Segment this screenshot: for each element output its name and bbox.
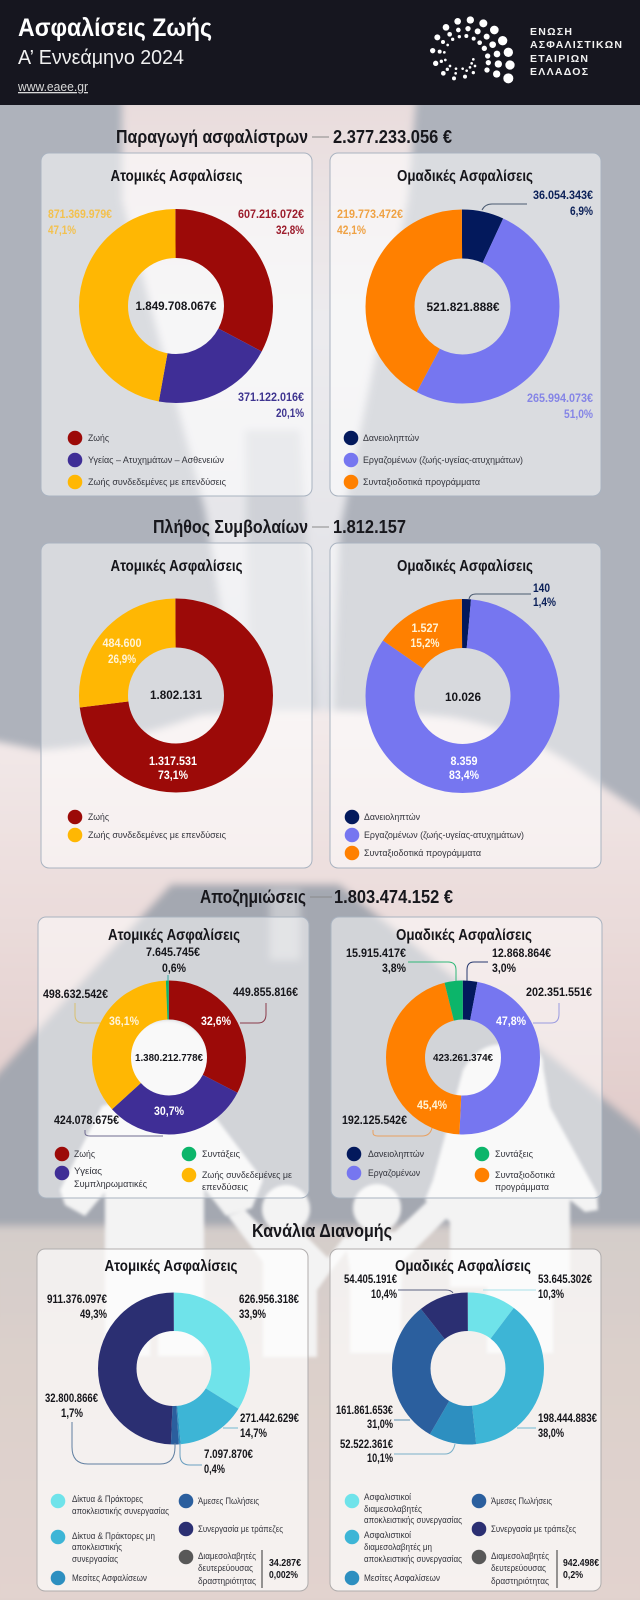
legend: αποκλειστικής [72,1541,122,1552]
legend: 942.498€ [563,1558,599,1569]
legend: αποκλειστικής συνεργασίας [364,1553,462,1564]
legend: Εργαζομένων [368,1167,420,1178]
heading: premium production [116,127,452,147]
legend: δραστηριότητας [491,1575,549,1586]
legend: Δίκτυα & Πράκτορες [72,1493,143,1504]
value labels: 1.317.531 [149,756,198,768]
value labels [43,947,299,1127]
value labels: 20,1% [276,408,304,420]
legend [68,810,226,842]
legend: Μεσίτες Ασφαλίσεων [72,1572,147,1583]
value labels: 83,4% [449,770,479,782]
heading: number of policies: Πλήθος Συμβολαίων [153,517,308,537]
legend: δραστηριότητας [198,1575,256,1586]
value labels: 10,3% [538,1289,564,1301]
legend: Δανειοληπτών [364,811,420,822]
value labels: 3,8% [382,963,406,975]
value labels: 45,4% [417,1100,447,1112]
panel title: Ομαδικές Ασφαλίσεις [395,1258,531,1275]
panel title: Ομαδικές Ασφαλίσεις [397,168,533,185]
legend: Συνταξιοδοτικά προγράμματα [364,847,482,858]
legend: Συνταξιοδοτικά προγράμματα [363,476,481,487]
legend [344,431,523,489]
leader lines [373,962,559,1136]
value labels: 38,0% [538,1428,564,1440]
donut total: 521.821.888€ [426,302,500,314]
value labels: 498.632.542€ [43,989,109,1001]
donut chart [112,1000,226,1115]
value labels: 1,7% [61,1408,83,1420]
legend: Δίκτυα & Πράκτορες μη [72,1530,155,1541]
legend: Άμεσες Πωλήσεις [198,1495,259,1506]
heading: premium production: 2.377.233.056 € [333,127,452,147]
logo: wordmark: ΕΛΛΑΔΟΣ [530,66,588,78]
value labels: 36.054.343€ [533,190,594,202]
value labels: 7.097.870€ [204,1449,254,1461]
value labels: 265.994.073€ [527,393,594,405]
panel: claims group [331,917,602,1198]
value labels: 3,0% [492,963,516,975]
header bar [0,0,640,105]
leader line [469,594,531,599]
legend: 34.287€ [269,1558,301,1569]
value labels: 1,4% [533,597,556,609]
donut chart [411,1312,525,1425]
legend: Ζωής συνδεδεμένες με επενδύσεις [88,476,226,487]
family silhouette [60,1020,598,1357]
legend: Συνεργασία με τράπεζες [491,1523,576,1534]
legend: Διαμεσολαβητές [198,1550,256,1561]
leader lines [75,975,266,1136]
title: Ασφαλίσεις Ζωής [18,14,212,42]
value labels [337,190,594,421]
value labels: 140 [533,583,550,595]
value labels: 15,2% [410,638,440,650]
legend: Δανειοληπτών [363,432,419,443]
legend: επενδύσεις [202,1181,248,1192]
heading: claims: Αποζημιώσεις [200,887,306,908]
panel: claims individual [38,917,309,1198]
donut chart [104,623,248,768]
value labels: 36,1% [109,1016,139,1028]
legend: Μεσίτες Ασφαλίσεων [364,1572,440,1583]
panel title: Ομαδικές Ασφαλίσεις [396,927,532,944]
value labels [336,1274,597,1465]
value labels: 47,1% [48,225,76,237]
legend: Ασφαλιστικοί [364,1529,411,1540]
value labels: 10,1% [367,1453,393,1465]
value labels: 52.522.361€ [340,1439,393,1451]
panel: channels group [330,1249,601,1591]
heading: premium production: Παραγωγή ασφαλίστρων [116,127,308,147]
value labels: 15.915.417€ [346,948,407,960]
value labels: 51,0% [564,409,593,421]
legend: 0,002% [269,1570,298,1581]
panel: policies individual [41,543,312,868]
heading: distribution channels: Κανάλια Διανομής [252,1221,392,1241]
value labels: 14,7% [240,1428,267,1440]
value labels: 371.122.016€ [238,392,305,404]
subtitle: Α’ Εννεάμηνο 2024 [18,47,184,69]
legend: αποκλειστικής συνεργασίας [72,1505,169,1516]
value labels: 198.444.883€ [538,1413,597,1425]
legend: 0,2% [563,1570,583,1581]
legend: διαμεσολαβητές [364,1503,422,1514]
value labels [48,209,305,420]
logo: wordmark: ΕΝΩΣΗ [530,26,572,38]
value labels: 1.527 [412,623,438,635]
heading: number of policies: 1.812.157 [333,517,406,537]
value labels: 219.773.472€ [337,209,404,221]
value labels: 32.800.866€ [45,1393,98,1405]
legend: διαμεσολαβητές μη [364,1541,432,1552]
value labels: 0,4% [204,1464,225,1476]
logo: wordmark: ΑΣΦΑΛΙΣΤΙΚΩΝ [530,39,622,51]
value labels: 53.645.302€ [538,1274,593,1286]
donut chart [117,1312,231,1425]
donut chart [406,1000,520,1115]
donut total: 1.802.131 [150,690,203,702]
value labels [102,638,198,782]
panel title: Ομαδικές Ασφαλίσεις [397,558,533,575]
donut total: 1.380.212.778€ [135,1052,203,1064]
value labels: 32,6% [201,1016,231,1028]
leader lines [72,1422,238,1465]
panel: premiums group [330,153,601,496]
legend [55,1147,292,1192]
value labels: 7.645.745€ [146,947,201,959]
value labels: 161.861.653€ [336,1405,393,1417]
legend [68,431,226,489]
value labels: 54.405.191€ [344,1274,397,1286]
leader line [482,204,527,210]
logo: dot spiral [430,16,515,83]
value labels: 0,6% [162,963,186,975]
panel: premiums individual [41,153,312,496]
legend: προγράμματα [495,1181,550,1192]
panel title: Ατομικές Ασφαλίσεις [104,1258,238,1275]
donut total: 10.026 [445,692,481,704]
donut total: 423.261.374€ [433,1052,493,1064]
legend: συνεργασίας [72,1553,118,1564]
legend: Ζωής συνδεδεμένες με επενδύσεις [88,829,226,840]
legend: Ζωής συνδεδεμένες με [202,1169,292,1180]
heading: claims: 1.803.474.152 € [334,887,453,907]
logo: wordmark [530,26,622,78]
value labels: 6,9% [570,206,593,218]
heading: claims [200,887,453,908]
donut chart [104,234,248,378]
value labels: 32,8% [276,225,304,237]
legend: Συμπληρωματικές [74,1178,147,1189]
legend: Συνταξιοδοτικά [495,1169,556,1180]
legend: Δανειοληπτών [368,1148,424,1159]
legend: δευτερεύουσας [491,1562,546,1573]
donut chart [390,234,535,379]
value labels: 73,1% [158,770,188,782]
legend: Εργαζομένων (ζωής-υγείας-ατυχημάτων) [363,454,523,465]
donut total: 1.849.708.067€ [136,301,217,313]
legend: Υγείας – Ατυχημάτων – Ασθενειών [88,454,224,465]
value labels: 911.376.097€ [47,1294,108,1306]
value labels: 192.125.542€ [342,1115,408,1127]
legend [345,1491,599,1588]
legend: Ζωής [88,432,109,443]
value labels: 26,9% [108,654,136,666]
logo: wordmark: ΕΤΑΙΡΙΩΝ [530,53,588,65]
legend: αποκλειστικής συνεργασίας [364,1514,462,1525]
panel: policies group [330,543,601,868]
legend: Ζωής [88,811,109,822]
legend: Συντάξεις [495,1148,533,1159]
value labels: 871.369.979€ [48,209,113,221]
legend [347,1147,556,1192]
value labels [410,583,556,782]
panel title: Ατομικές Ασφαλίσεις [108,927,240,944]
value labels: 449.855.816€ [233,987,299,999]
value labels [45,1294,300,1476]
value labels: 271.442.629€ [240,1413,299,1425]
donut chart [390,624,535,768]
panel: channels individual [37,1249,308,1591]
legend: Ζωής [74,1148,95,1159]
panel title: Ατομικές Ασφαλίσεις [110,168,242,185]
legend [345,810,524,860]
legend: Υγείας [74,1165,102,1176]
legend: Άμεσες Πωλήσεις [491,1495,552,1506]
legend: Εργαζομένων (ζωής-υγείας-ατυχημάτων) [364,829,524,840]
value labels: 484.600 [102,638,142,650]
value labels: 47,8% [496,1016,526,1028]
heading: number of policies [153,517,406,537]
value labels: 626.956.318€ [239,1294,300,1306]
value labels: 33,9% [239,1309,266,1321]
value labels: 424.078.675€ [54,1115,120,1127]
value labels: 10,4% [371,1289,397,1301]
legend: Διαμεσολαβητές [491,1550,549,1561]
value labels: 49,3% [80,1309,107,1321]
value labels [342,948,593,1127]
website link: www.eaee.gr [17,79,89,94]
legend: Συντάξεις [202,1148,240,1159]
panel title: Ατομικές Ασφαλίσεις [110,558,242,575]
value labels: 607.216.072€ [238,209,305,221]
value labels: 202.351.551€ [526,987,593,999]
legend: Ασφαλιστικοί [364,1491,411,1502]
leader lines [394,1290,536,1454]
legend: Συνεργασία με τράπεζες [198,1523,283,1534]
value labels: 30,7% [154,1106,184,1118]
value labels: 42,1% [337,225,366,237]
value labels: 8.359 [450,756,478,768]
legend [51,1493,301,1588]
legend: δευτερεύουσας [198,1562,253,1573]
value labels: 31,0% [367,1419,393,1431]
value labels: 12.868.864€ [492,948,552,960]
